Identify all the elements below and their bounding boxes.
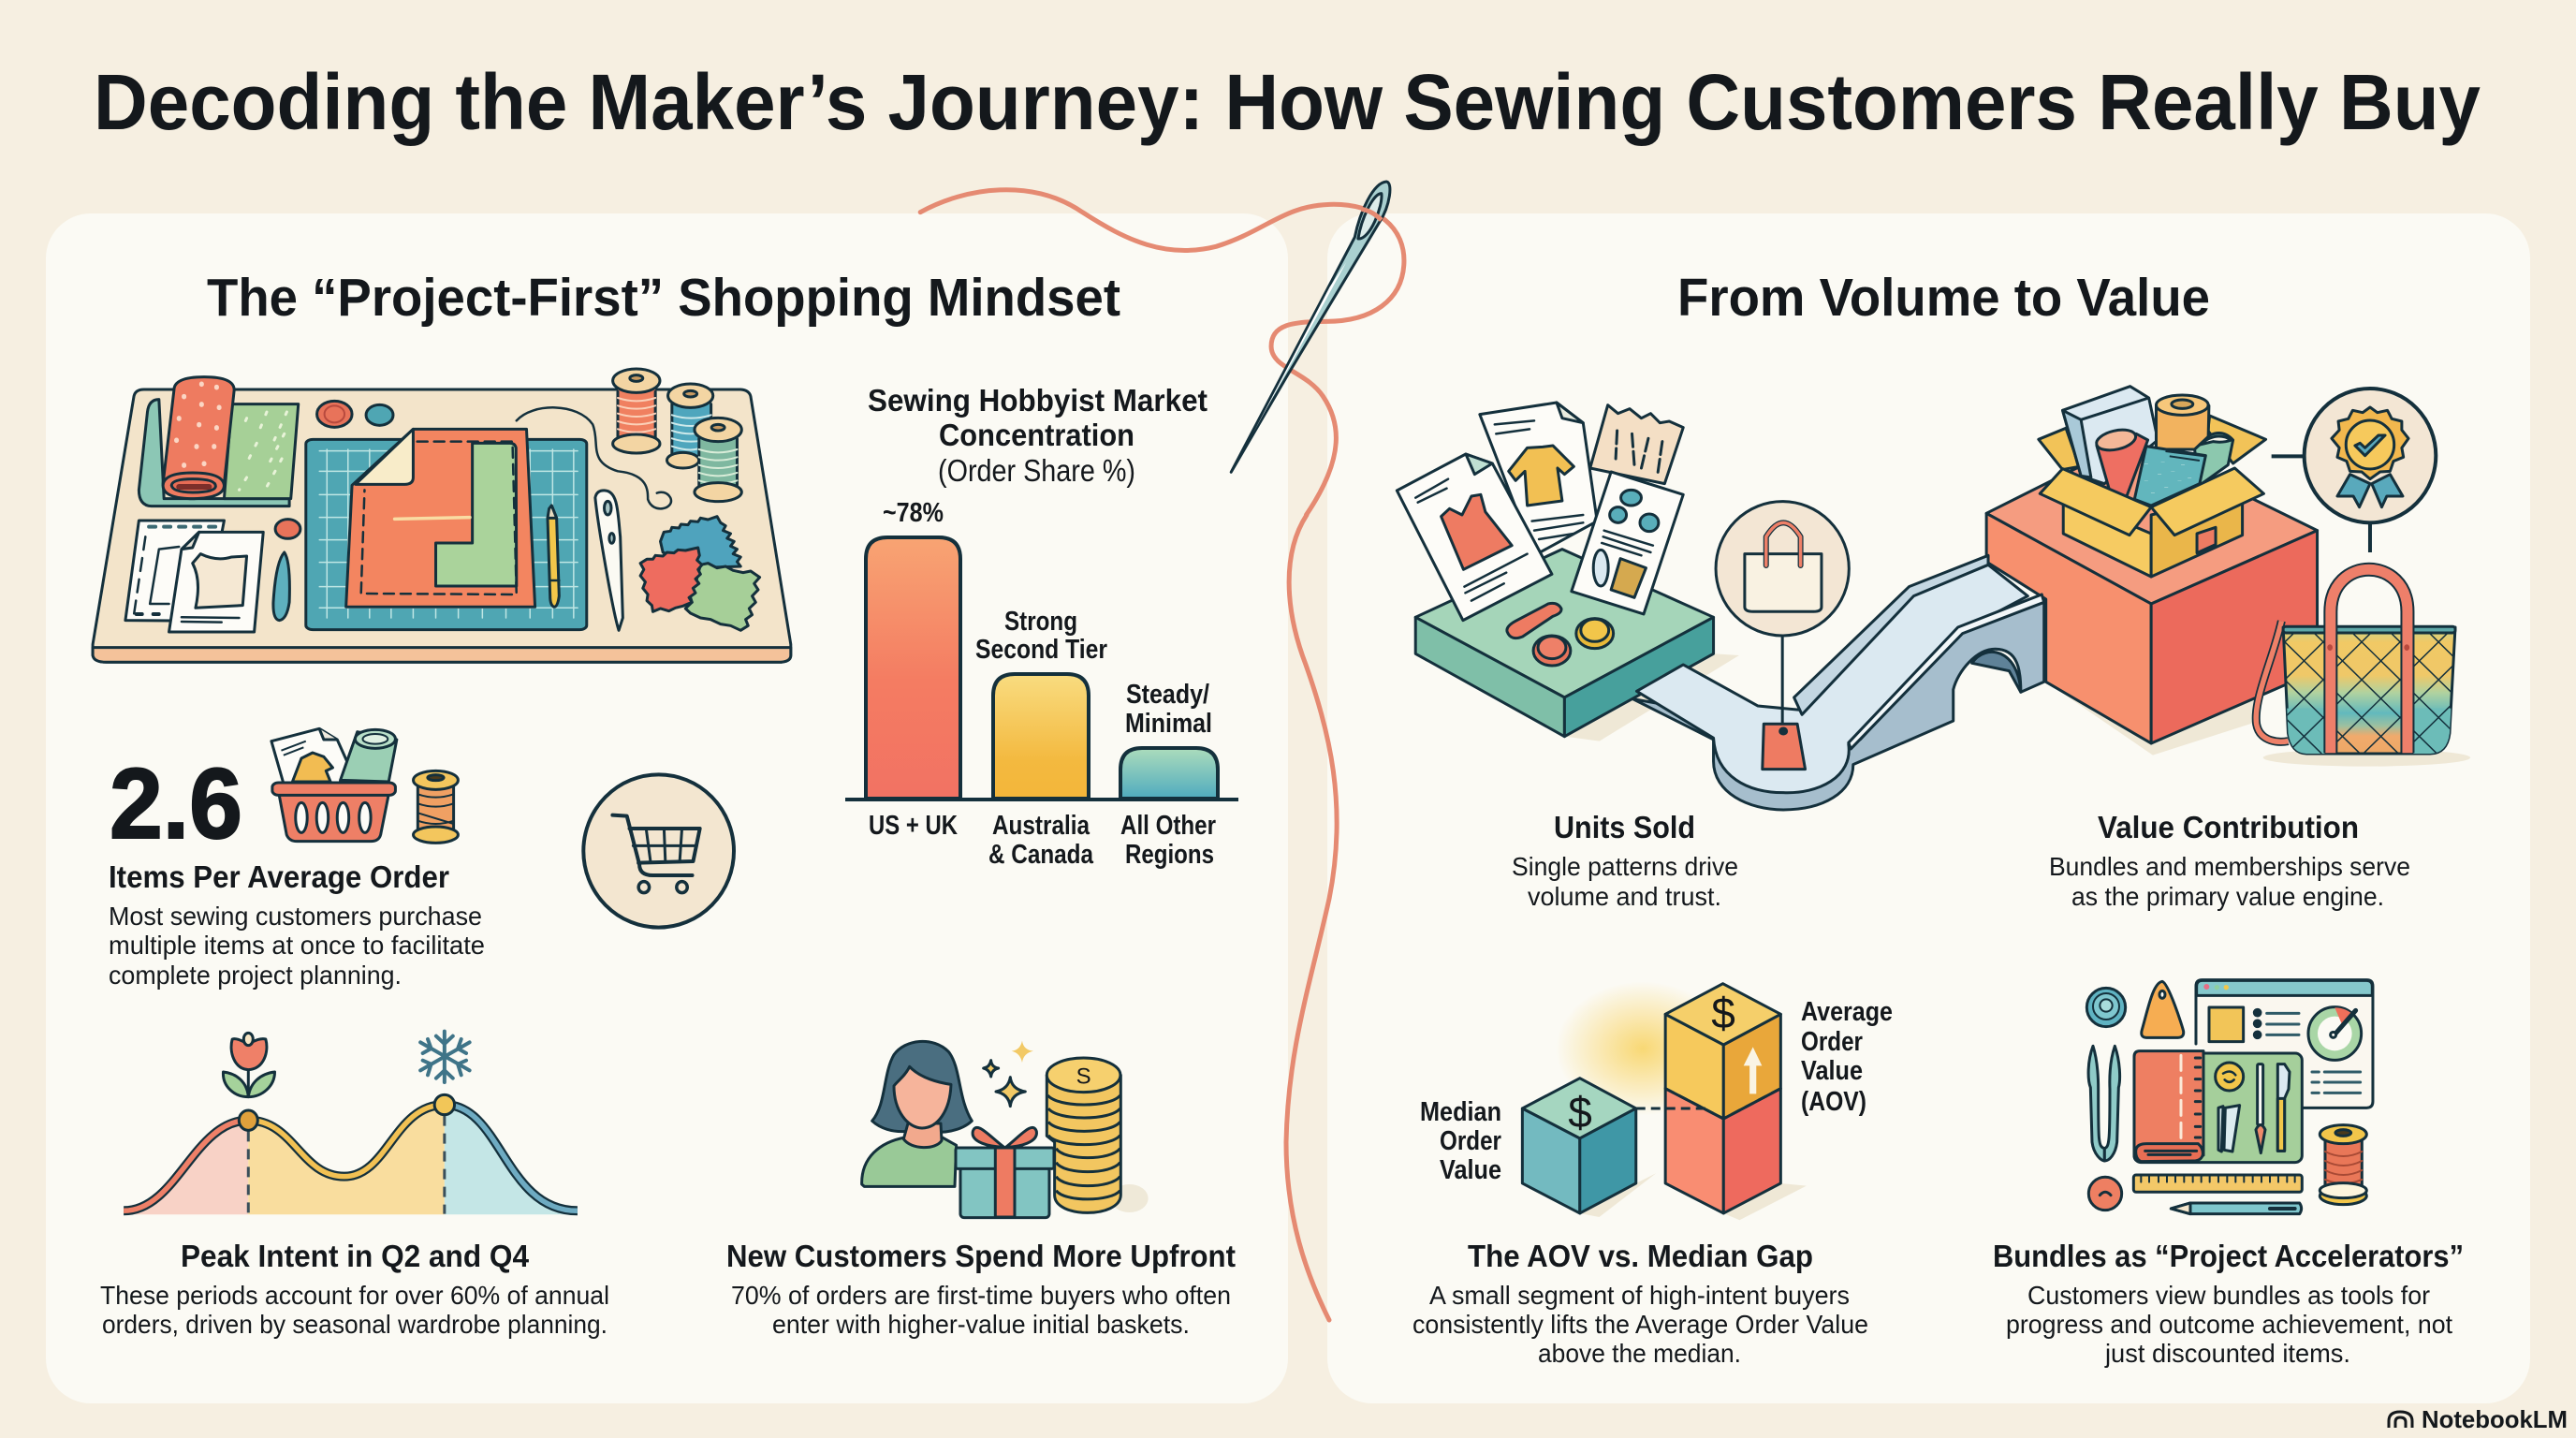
- text: AOV vs median gap: consistently lifts the Average Order Value: [1412, 1310, 1868, 1339]
- text: bundles as project accelerators: progress and outcome achievement, not: [2006, 1310, 2452, 1339]
- illustration: new customer with gift and coins: [862, 1041, 1149, 1218]
- label: median order value: Order: [1440, 1126, 1501, 1156]
- text: value contribution: Bundles and memberships serve: [2049, 852, 2410, 881]
- stat heading: Items Per Average Order: [109, 859, 449, 894]
- text: AOV vs median gap: [1412, 1239, 1868, 1368]
- bar: US + UK: [866, 537, 960, 799]
- bar: Australia & Canada: [993, 674, 1089, 799]
- chart baseline: [845, 798, 1238, 801]
- label: average order value: [1801, 997, 1893, 1117]
- text: units sold: volume and trust.: [1528, 882, 1721, 911]
- text: peak intent: orders, driven by seasonal wardrobe planning.: [102, 1310, 607, 1339]
- label: average order value: Average: [1801, 997, 1893, 1027]
- text: bundles as project accelerators: just discounted items.: [2104, 1339, 2350, 1368]
- text: bundles as project accelerators: [1993, 1239, 2464, 1368]
- title: Decoding the Maker’s Journey: How Sewing Customers Really Buy: [94, 58, 2481, 146]
- axis labels: Australia: [992, 811, 1090, 841]
- icon: price tag with bag callout: [1716, 502, 1849, 770]
- stat description: multiple items at once to facilitate: [109, 931, 485, 960]
- icon: quality medal: [2272, 389, 2436, 552]
- text: new customers: [726, 1239, 1236, 1339]
- logo: NotebookLM: NotebookLM: [2422, 1405, 2568, 1433]
- text: value contribution: as the primary value engine.: [2071, 882, 2384, 911]
- text: new customers: enter with higher-value initial baskets.: [772, 1310, 1190, 1339]
- cube graphics: [1522, 981, 1807, 1220]
- bar value labels: Steady/: [1126, 680, 1209, 710]
- chart title: Concentration: [939, 418, 1134, 452]
- text: peak intent: These periods account for over 60% of annual: [100, 1281, 609, 1310]
- right panel heading: From Volume to Value: [1677, 268, 2210, 328]
- dollar signs: $: [1568, 1088, 1592, 1137]
- label: average order value: Order: [1801, 1027, 1863, 1057]
- text: units sold: Units Sold: [1554, 810, 1695, 844]
- icon: quilted tote bag: [2252, 562, 2470, 766]
- bar value labels: Strong: [1004, 607, 1077, 637]
- axis labels: Regions: [1125, 840, 1214, 870]
- text: AOV vs median gap: A small segment of high-intent buyers: [1429, 1281, 1850, 1310]
- text: AOV vs median gap: above the median.: [1538, 1339, 1741, 1368]
- axis labels: US + UK: [869, 811, 958, 841]
- text: peak intent: Peak Intent in Q2 and Q4: [181, 1239, 530, 1273]
- text: units sold: [1512, 810, 1738, 911]
- illustration: project accelerator toolkit: [2086, 980, 2373, 1214]
- dollar signs: [1568, 989, 1735, 1137]
- illustration: funnel from pattern platform to ramp: [1397, 403, 2044, 810]
- text: value contribution: [2049, 810, 2410, 911]
- label: average order value: (AOV): [1801, 1087, 1866, 1117]
- stat: 2.6 items per order: [109, 728, 485, 990]
- bar: all other regions: [1120, 748, 1218, 799]
- text: bundles as project accelerators: Bundles as “Project Accelerators”: [1993, 1239, 2464, 1273]
- text: bundles as project accelerators: Customers view bundles as tools for: [2027, 1281, 2430, 1310]
- chart: seasonal peak curve: [124, 1032, 578, 1214]
- panel: project-first shopping mindset: [46, 213, 1288, 1403]
- text: AOV vs median gap: The AOV vs. Median Gap: [1468, 1239, 1813, 1273]
- chart: sewing hobbyist market concentration: [845, 383, 1238, 870]
- icon: shopping cart badge: [583, 774, 734, 928]
- icon: winter snowflake: [420, 1032, 470, 1082]
- chart title: [868, 383, 1208, 488]
- text: new customers: New Customers Spend More Upfront: [726, 1239, 1236, 1273]
- text: units sold: Single patterns drive: [1512, 852, 1738, 881]
- icon: pattern sheets: [1397, 403, 1683, 621]
- chart: AOV vs median cubes: [1420, 981, 1893, 1220]
- text: peak intent: [100, 1239, 609, 1339]
- stat description: complete project planning.: [109, 961, 402, 990]
- big number: 2.6: [110, 747, 242, 859]
- icon: basket with spool: [271, 728, 458, 843]
- dollar signs: $: [1711, 989, 1735, 1037]
- label: median order value: [1420, 1097, 1501, 1185]
- label: median order value: Value: [1440, 1155, 1501, 1185]
- icon: sewing needle: [1231, 182, 1390, 472]
- icon: notions on platform: [1507, 603, 1614, 666]
- chart title: (Order Share %): [938, 453, 1135, 488]
- illustration: new customer with gift and coins: S: [1076, 1064, 1091, 1089]
- left panel heading: The “Project-First” Shopping Mindset: [207, 268, 1120, 328]
- axis labels: All Other: [1120, 811, 1216, 841]
- text: new customers: 70% of orders are first-time buyers who often: [731, 1281, 1231, 1310]
- stat description: Most sewing customers purchase: [109, 902, 482, 931]
- label: median order value: Median: [1420, 1097, 1501, 1127]
- axis labels: [869, 811, 1216, 870]
- bar value labels: Minimal: [1125, 709, 1212, 739]
- chart title: Sewing Hobbyist Market: [868, 383, 1208, 418]
- axis labels: & Canada: [988, 840, 1094, 870]
- icon: spring tulip: [223, 1033, 274, 1097]
- thread: [920, 190, 1404, 1320]
- illustration: sewing workbench: [93, 369, 791, 662]
- stat description: [109, 902, 485, 990]
- bar value labels: ~78%: [883, 498, 944, 528]
- bar value labels: [883, 498, 1212, 739]
- label: average order value: Value: [1801, 1056, 1863, 1086]
- illustration: value box with quilted bag: [1984, 385, 2470, 766]
- text: value contribution: Value Contribution: [2098, 810, 2359, 844]
- bar value labels: Second Tier: [975, 635, 1107, 665]
- panel: from volume to value: [1327, 213, 2530, 1403]
